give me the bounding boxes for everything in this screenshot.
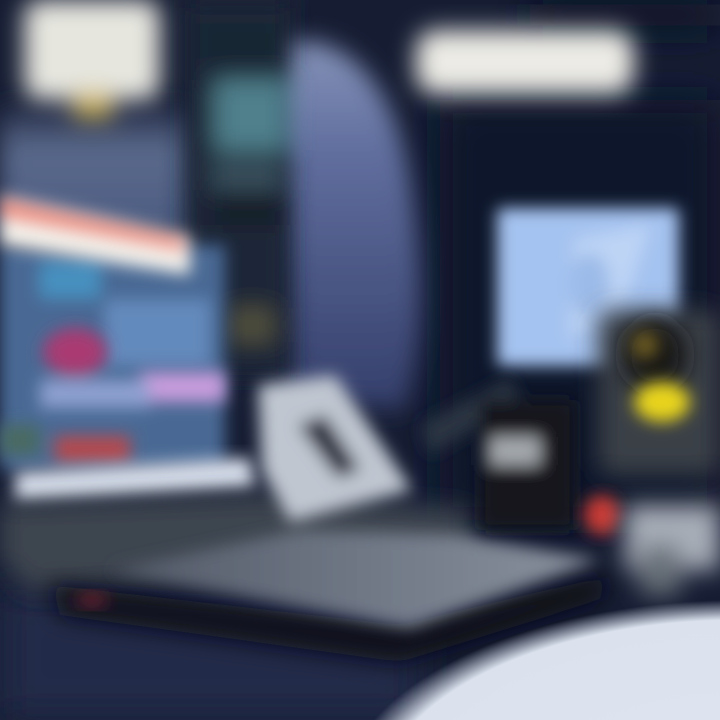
panel: dark tower equipment	[185, 0, 290, 375]
panel: grey instrument with yellow light	[598, 310, 720, 475]
panel: dark desk surface	[0, 495, 610, 662]
panel: dark equipment box	[420, 378, 575, 530]
icon: white ceiling light left	[24, 0, 160, 118]
panel: foreground light objects right	[625, 505, 720, 595]
white keyboard strip	[15, 458, 255, 503]
red and white banner	[0, 195, 190, 275]
icon: ceiling light strip right	[416, 30, 634, 94]
instrument body	[598, 310, 720, 475]
desk body	[0, 495, 470, 590]
panel: blue glowing monitor	[497, 208, 679, 366]
floor	[0, 590, 420, 720]
left wall panel	[0, 105, 195, 235]
icon: yellow light	[631, 331, 690, 422]
icon: red accent on desk front	[76, 593, 108, 607]
desk front shadow	[50, 575, 610, 662]
panel: left data screen	[0, 195, 255, 503]
panel: curved blue column	[275, 41, 421, 410]
panel: white foreground surface	[340, 590, 720, 720]
right dark wall	[440, 0, 720, 520]
coloured chart blobs	[0, 328, 225, 462]
screen body	[0, 245, 225, 470]
icon: white device on stand	[258, 375, 412, 522]
desk top	[110, 530, 600, 628]
dark lens	[623, 319, 687, 391]
icon: red button	[584, 495, 620, 535]
